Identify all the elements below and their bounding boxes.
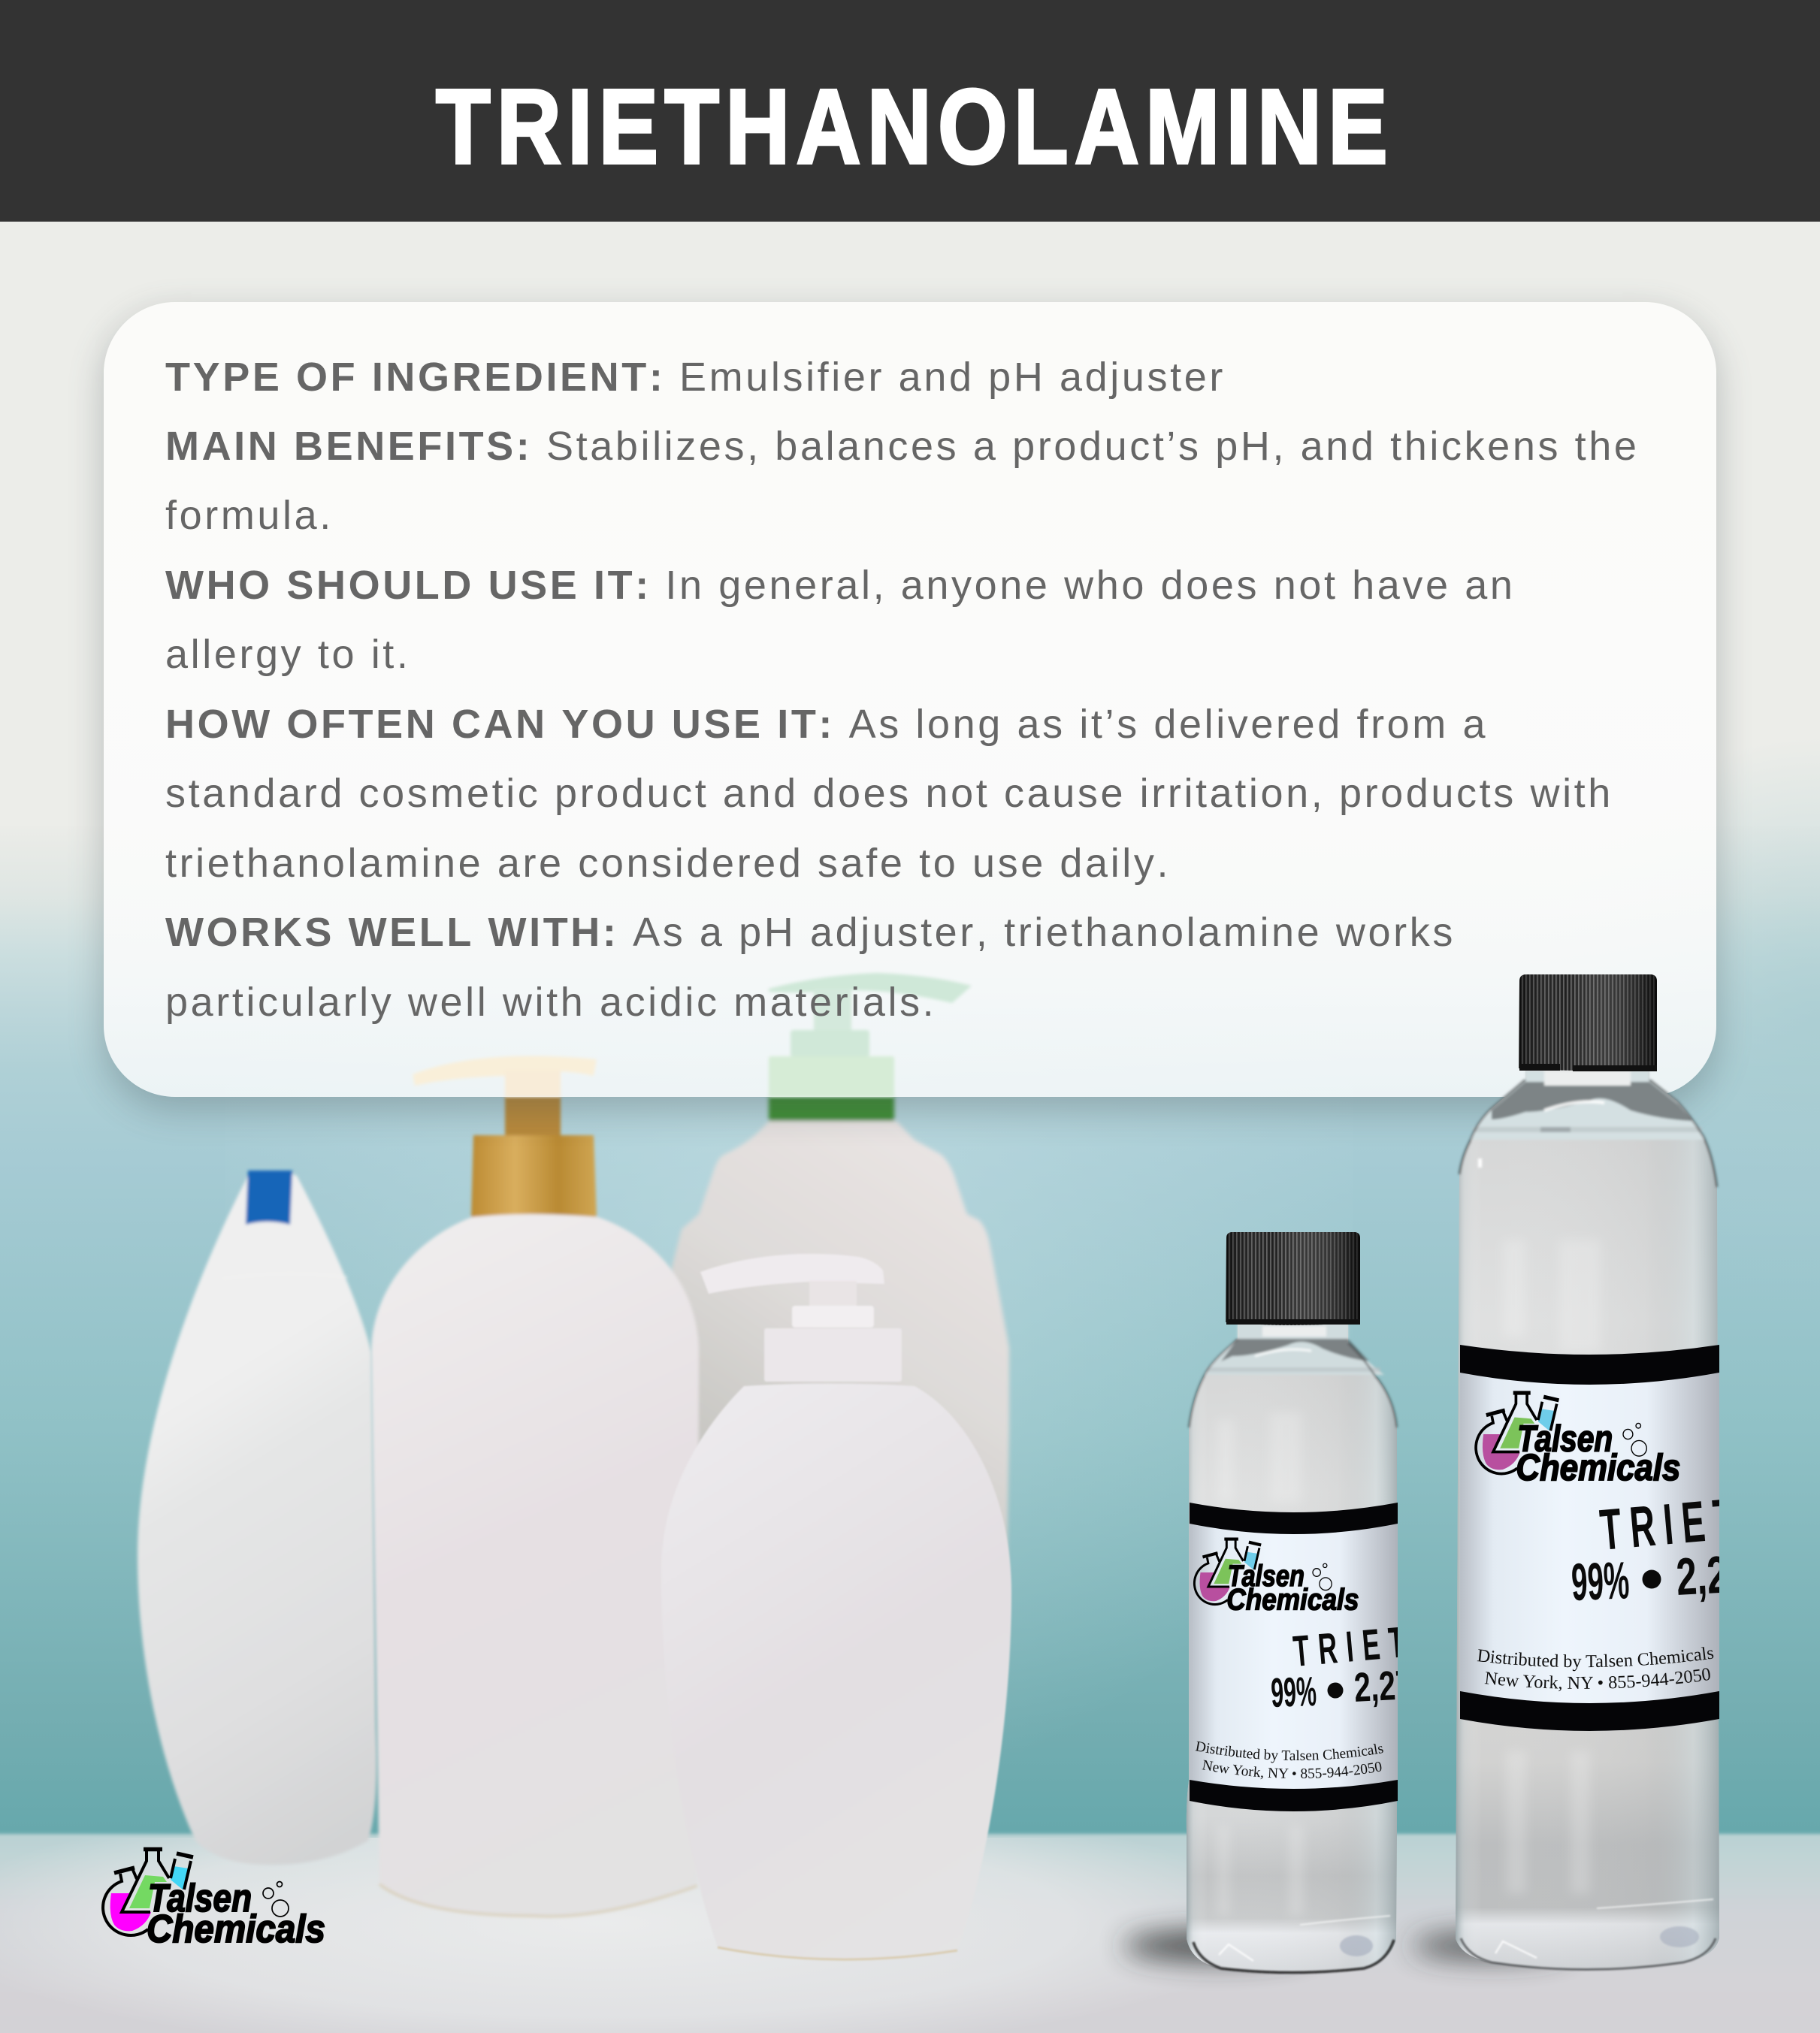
large bottle base details [1461,1899,1716,1970]
small label product text: 2,27 [1353,1663,1413,1711]
small label product text: TRIET [1292,1618,1416,1676]
text: main benefits: MAIN BENEFITS: Stabilizes, balances a product’s pH, and thickens the [165,424,1640,469]
large label logo: Chemicals [1516,1448,1680,1488]
large label distributor text [1477,1647,1713,1692]
small bottle streaks [1217,1412,1304,1916]
text: who should use it [165,563,1516,677]
panel: ingredient facts card [104,302,1716,1097]
small label product text: 99% [1270,1669,1317,1716]
small label distributor text: Distributed by Talsen Chemicals [1195,1741,1383,1763]
small bottle body [1187,1324,1397,1972]
title: TRIETHANOLAMINE [436,67,1394,186]
small label distributor text: New York, NY • 855-944-2050 [1202,1760,1381,1779]
small label logo: Talsen [1228,1560,1305,1593]
large bottle shoulder glass [1459,1071,1717,1187]
text: who should use it: WHO SHOULD USE IT: In general, anyone who does not have an [165,563,1516,608]
shadows under clear bottles [1123,1931,1571,1961]
large label product text: TRIET [1598,1487,1746,1563]
small bottle cap [1226,1232,1360,1325]
large bottle edge shading [1456,1071,1719,1969]
logo wordmark: Chemicals [147,1908,325,1951]
logo wordmark: Talsen [148,1877,252,1920]
small label product text [1271,1627,1398,1707]
large label logo: Talsen [1517,1418,1613,1460]
logo bubbles [263,1881,289,1917]
small bottle edge shading [1187,1324,1397,1972]
text: works well with: particularly well with acidic materials. [165,980,936,1025]
bottle: green pump, back [671,1096,1009,1570]
large label product text: 99% [1571,1551,1631,1612]
large bottle cap [1519,974,1657,1071]
text: who should use it: allergy to it. [165,632,411,677]
small bottle shoulder glass [1189,1324,1397,1427]
large label logo [1476,1393,1680,1488]
text: works well with: WORKS WELL WITH: As a pH adjuster, triethanolamine works [165,910,1456,955]
large bottle label [1460,1345,1719,1731]
logo flask fills [110,1866,189,1931]
logo: Talsen Chemicals, bottom left [103,1850,325,1951]
product: small clear bottle [1186,1232,1399,1975]
large label product text: 2,2 [1675,1545,1729,1606]
bottle: gold pump, centre [371,1096,699,1917]
small label logo [1194,1539,1359,1617]
bottle: white pump, front [661,1254,1011,1961]
text: how often can you use it: triethanolamine are considered safe to use daily. [165,841,1171,886]
large label distributor text: Distributed by Talsen Chemicals [1477,1647,1713,1671]
text: type of ingredient: TYPE OF INGREDIENT: Emulsifier and pH adjuster [165,355,1226,400]
bottle: blue cap, left [138,1171,376,1865]
small label distributor text [1195,1741,1383,1779]
text: works well with [165,910,1456,1025]
small label logo: Chemicals [1226,1584,1359,1617]
text: how often can you use it [165,702,1613,886]
header bar [0,0,1820,222]
product: large clear bottle [1456,974,1719,1971]
text: main benefits [165,424,1640,538]
large bottle streaks [1503,1240,1601,1893]
text: how often can you use it: HOW OFTEN CAN YOU USE IT: As long as it’s delivered from a [165,702,1488,747]
large label distributor text: New York, NY • 855-944-2050 [1485,1668,1710,1692]
logo flask outlines [103,1850,193,1935]
text: how often can you use it: standard cosmetic product and does not cause irritation, products with [165,771,1613,816]
text: main benefits: formula. [165,493,334,538]
large label product text [1572,1500,1719,1602]
logo wordmark [147,1877,325,1951]
small bottle label [1190,1503,1398,1811]
small bottle base details [1193,1916,1394,1973]
card shadow [104,314,1716,1110]
large bottle body [1456,1071,1719,1969]
pump tops seen through the card [413,973,972,1097]
